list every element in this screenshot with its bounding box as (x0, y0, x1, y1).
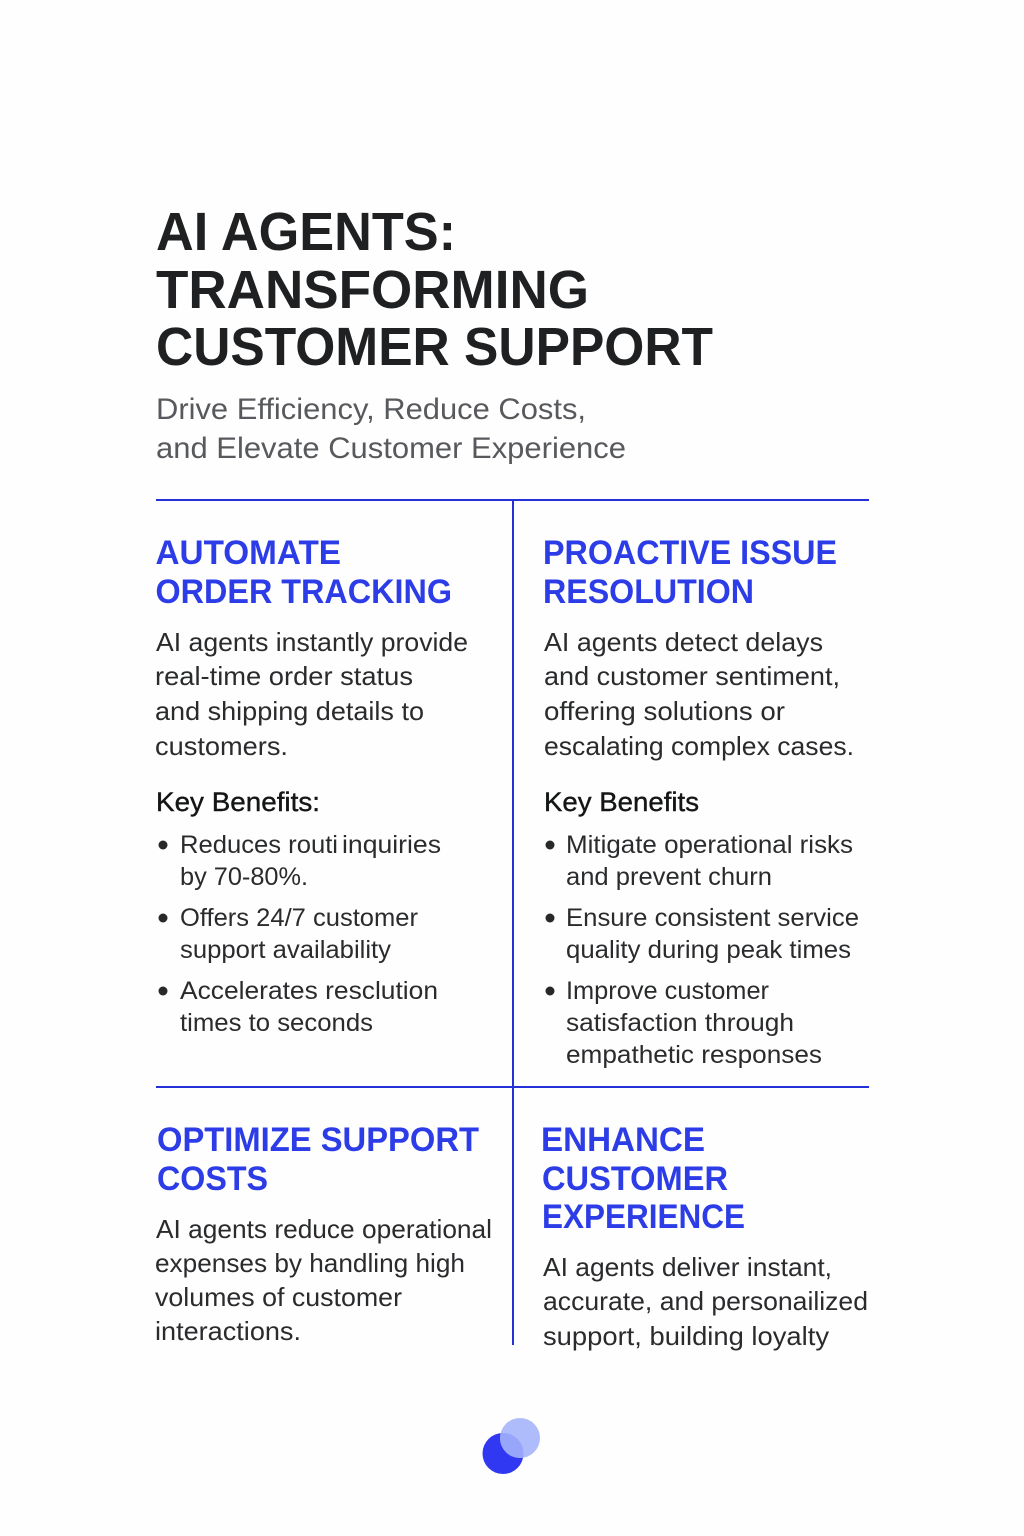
benefits list: times to seconds (180, 1009, 373, 1037)
benefits list (546, 831, 859, 1069)
title (156, 202, 713, 377)
heading: optimize support costs (157, 1121, 479, 1198)
key benefits label: Key Benefits: (156, 787, 320, 817)
description: AI agents instantly provide (156, 627, 468, 657)
benefits list: Ensure consistent service (566, 904, 859, 932)
benefits list: satisfaction through (566, 1009, 794, 1037)
description: real-time order status (155, 661, 413, 691)
heading: optimize support costs: OPTIMIZE SUPPORT (157, 1121, 479, 1159)
heading: automate order tracking: ORDER TRACKING (156, 573, 452, 611)
subtitle (156, 393, 626, 465)
heading: enhance customer experience: CUSTOMER (542, 1160, 728, 1198)
panel: optimize support costs (155, 1121, 492, 1346)
description (543, 1252, 868, 1351)
key benefits label: Key Benefits (544, 787, 699, 817)
heading: enhance customer experience: EXPERIENCE (542, 1198, 745, 1236)
description: AI agents detect delays (544, 627, 823, 657)
benefits list (158, 831, 441, 1037)
description: expenses by handling high (155, 1248, 465, 1278)
description: AI agents reduce operational (156, 1214, 492, 1244)
subtitle: Drive Efficiency, Reduce Costs, (156, 393, 586, 426)
description: volumes of customer (155, 1282, 402, 1312)
heading: proactive issue resolution: RESOLUTION (543, 573, 754, 611)
benefits list: inquiries (342, 831, 441, 859)
heading: automate order tracking: AUTOMATE (156, 534, 341, 572)
subtitle: and Elevate Customer Experience (156, 432, 626, 465)
panel: automate order tracking (155, 534, 468, 1037)
benefits list: Offers 24/7 customer (180, 904, 418, 932)
heading: proactive issue resolution (543, 534, 837, 611)
heading: automate order tracking (156, 534, 452, 611)
description (155, 1214, 492, 1346)
benefits list: quality during peak times (566, 936, 851, 964)
title: AI AGENTS: (156, 202, 456, 262)
description: escalating complex cases. (544, 731, 854, 761)
benefits list: Reduces routi (180, 831, 338, 859)
title: CUSTOMER SUPPORT (156, 317, 713, 377)
heading: proactive issue resolution: PROACTIVE ISSUE (543, 534, 837, 572)
description: support, building loyalty (543, 1321, 829, 1351)
benefits list: and prevent churn (566, 863, 772, 891)
title: TRANSFORMING (156, 260, 589, 320)
description: AI agents deliver instant, (543, 1252, 832, 1282)
description (155, 627, 468, 761)
panel: proactive issue resolution (543, 534, 859, 1069)
description: offering solutions or (544, 696, 785, 726)
heading: enhance customer experience (541, 1121, 745, 1236)
description: and customer sentiment, (544, 661, 840, 691)
description: and shipping details to (155, 696, 424, 726)
panel: enhance customer experience (541, 1121, 868, 1351)
description (544, 627, 854, 761)
benefits list: support availability (180, 936, 392, 964)
benefits list: Accelerates resclution (180, 977, 438, 1005)
heading: enhance customer experience: ENHANCE (541, 1121, 705, 1159)
icon: overlapping circles logo (482, 1418, 540, 1474)
description: customers. (155, 731, 288, 761)
description: accurate, and personailized (543, 1286, 868, 1316)
heading: optimize support costs: COSTS (157, 1160, 268, 1198)
benefits list: by 70-80%. (180, 863, 308, 891)
benefits list: Improve customer (566, 977, 769, 1005)
benefits list: Mitigate operational risks (566, 831, 853, 859)
grid lines (156, 499, 869, 1345)
benefits list: empathetic responses (566, 1041, 822, 1069)
description: interactions. (155, 1316, 301, 1346)
